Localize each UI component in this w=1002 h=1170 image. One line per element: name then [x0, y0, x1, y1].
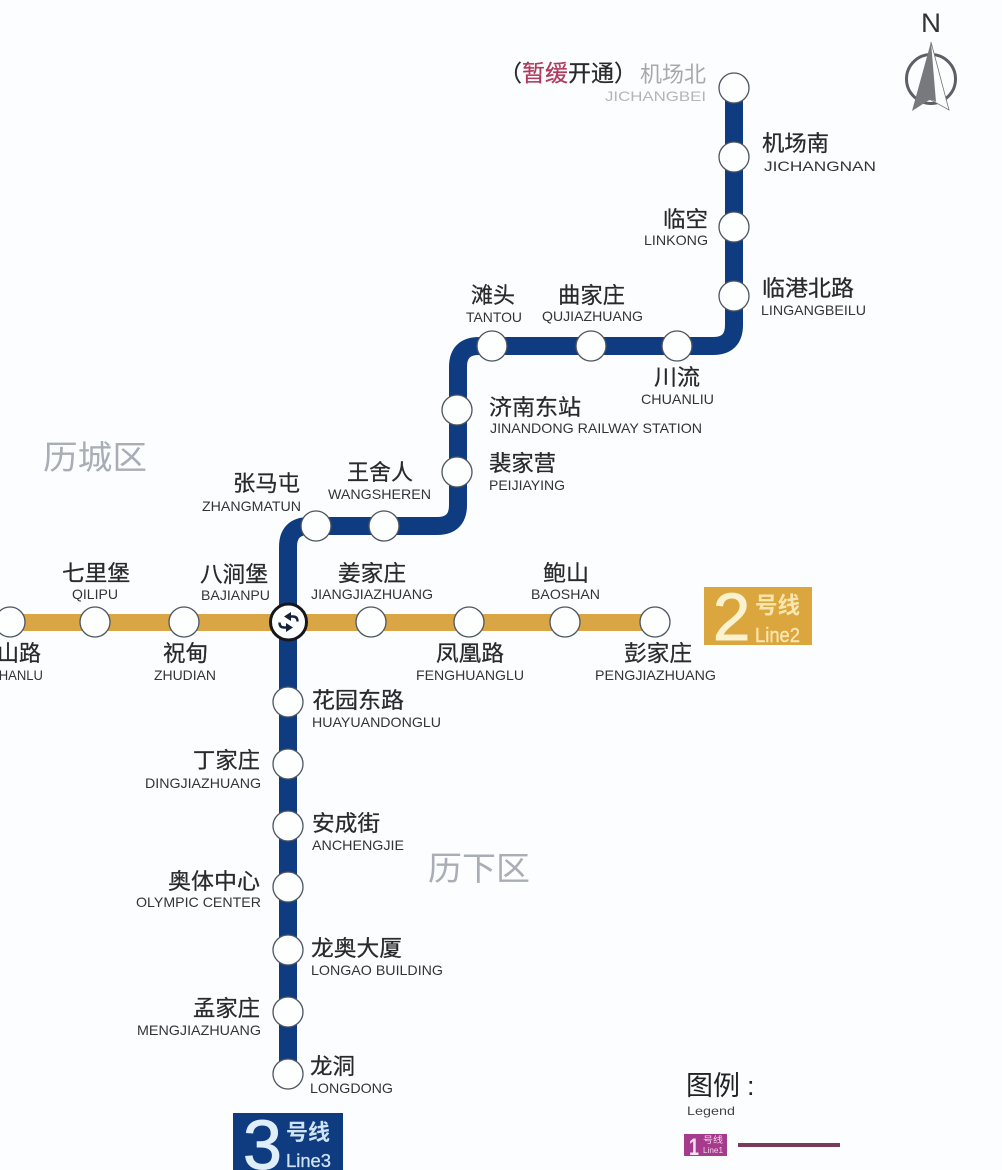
station: Pengjiazhuang [595, 641, 716, 683]
station: Peijiaying: 裴家营 [489, 451, 556, 476]
station: Huayuandonglu: HUAYUANDONGLU [312, 714, 441, 730]
station: Fenghuanglu [416, 641, 524, 683]
station: Baoshan: BAOSHAN [531, 586, 600, 602]
badge: line 3: 号线 [286, 1120, 330, 1145]
legend: line 1 badge: Line1 [703, 1146, 724, 1155]
station: Chuanliu [641, 365, 714, 407]
station: Huayuandonglu [312, 688, 441, 730]
station: Longao Building [311, 936, 443, 978]
station: Longdong: 龙洞 [310, 1054, 355, 1079]
station: Mengjiazhuang [137, 996, 261, 1038]
line 2 track [0, 614, 655, 631]
station: Lingangbeilu [761, 276, 866, 318]
station: Jichangnan: JICHANGNAN [764, 158, 876, 174]
badge: line 3 [233, 1106, 343, 1170]
legend heading: 图例 : [686, 1071, 755, 1101]
station: Mengjiazhuang: 孟家庄 [193, 996, 260, 1021]
station: Dingjiazhuang [145, 748, 261, 791]
station: Zhudian [154, 641, 216, 683]
station: Zhangmatun [202, 471, 301, 514]
station: Dingjiazhuang: DINGJIAZHUANG [145, 775, 261, 791]
station: Bajianpu: BAJIANPU [201, 587, 270, 603]
station: Pengjiazhuang: PENGJIAZHUANG [595, 667, 716, 683]
legend: line 1 sample [738, 1143, 840, 1147]
station: Qujiazhuang [542, 283, 643, 324]
badge: line 2: 2 [713, 580, 750, 655]
badge: line 2: 号线 [755, 592, 800, 618]
icon: interchange [270, 604, 306, 640]
station: Lingangbeilu: LINGANGBEILU [761, 302, 866, 318]
station: Linkong [644, 207, 708, 248]
station: clipped Shanlu [0, 641, 43, 683]
station: Zhudian: 祝甸 [163, 641, 208, 666]
station: Longdong [310, 1054, 393, 1096]
station: Baoshan [531, 561, 600, 602]
station: Jiangjiazhuang: 姜家庄 [338, 561, 406, 586]
station: Jichangnan [762, 131, 876, 174]
badge: line 2: Line2 [755, 625, 800, 647]
station: Chuanliu: CHUANLIU [641, 391, 714, 407]
station: Jichangbei: JICHANGBEI [605, 88, 706, 104]
station: Jichangbei: 机场北 [640, 62, 706, 87]
station: Qilipu [62, 561, 130, 602]
station: Wangsheren: 王舍人 [347, 460, 413, 485]
station: Huayuandonglu: 花园东路 [312, 688, 404, 713]
station: Jiangjiazhuang: JIANGJIAZHUANG [311, 586, 433, 602]
station: Longdong: LONGDONG [310, 1080, 393, 1096]
station: Fenghuanglu: 凤凰路 [436, 641, 504, 666]
station: Mengjiazhuang: MENGJIAZHUANG [137, 1022, 261, 1038]
station: Peijiaying [489, 451, 565, 493]
station: Zhangmatun: ZHANGMATUN [202, 498, 301, 514]
station: Dingjiazhuang: 丁家庄 [193, 748, 260, 773]
station: Linkong: LINKONG [644, 232, 708, 248]
legend: line 1 badge [684, 1134, 727, 1161]
station: Anchengjie: 安成街 [312, 811, 380, 836]
station: Peijiaying: PEIJIAYING [489, 477, 565, 493]
station: Anchengjie: ANCHENGJIE [312, 837, 404, 853]
station: Qujiazhuang: QUJIAZHUANG [542, 308, 643, 324]
station: Tantou: TANTOU [466, 309, 522, 325]
legend heading [686, 1071, 755, 1118]
station: Lingangbeilu: 临港北路 [762, 276, 854, 301]
station: Fenghuanglu: FENGHUANGLU [416, 667, 524, 683]
station: Olympic Center: OLYMPIC CENTER [136, 894, 261, 910]
station: Qilipu: QILIPU [72, 586, 118, 602]
station: Tantou: 滩头 [471, 283, 515, 308]
icon: north compass: N [921, 8, 941, 38]
district label: Lixia: 历下区 [428, 850, 530, 887]
station: Tantou [466, 283, 522, 325]
station: Longao Building: 龙奥大厦 [311, 936, 402, 961]
station: Olympic Center [136, 869, 261, 910]
station: Jinandong Railway Station [489, 395, 702, 436]
line 3 track [288, 88, 734, 1074]
station: Jiangjiazhuang [311, 561, 433, 602]
station: Qilipu: 七里堡 [62, 561, 130, 586]
station: Bajianpu [200, 562, 270, 603]
legend: line 1 badge: 1 [689, 1134, 699, 1161]
station: Zhudian: ZHUDIAN [154, 667, 216, 683]
station: Longao Building: LONGAO BUILDING [311, 962, 443, 978]
station: Anchengjie [312, 811, 404, 853]
station: Olympic Center: 奥体中心 [168, 869, 260, 894]
station: Bajianpu: 八涧堡 [200, 562, 268, 587]
station: Linkong: 临空 [663, 207, 708, 232]
station: Wangsheren: WANGSHEREN [328, 486, 431, 502]
line 3 stations [273, 73, 749, 1089]
suspended notice: （暂缓开通） [499, 60, 637, 86]
station: Zhangmatun: 张马屯 [233, 471, 300, 496]
station: Jinandong Railway Station: 济南东站 [489, 395, 581, 420]
legend: line 1 badge: 号线 [703, 1134, 723, 1145]
station: Pengjiazhuang: 彭家庄 [624, 641, 692, 666]
station: Baoshan: 鲍山 [543, 561, 589, 586]
station: Jichangbei [605, 62, 706, 104]
station: Chuanliu: 川流 [654, 365, 700, 390]
station: Jichangnan: 机场南 [762, 131, 829, 156]
icon: north compass [906, 8, 956, 111]
station: Jinandong Railway Station: JINANDONG RAILWAY STATION [490, 420, 702, 436]
station: Wangsheren [328, 460, 431, 502]
district label: Licheng: 历城区 [43, 439, 147, 476]
line 2 stations [0, 607, 670, 637]
legend heading: Legend [687, 1104, 735, 1118]
badge: line 2 [704, 580, 812, 655]
station: Qujiazhuang: 曲家庄 [558, 283, 625, 308]
